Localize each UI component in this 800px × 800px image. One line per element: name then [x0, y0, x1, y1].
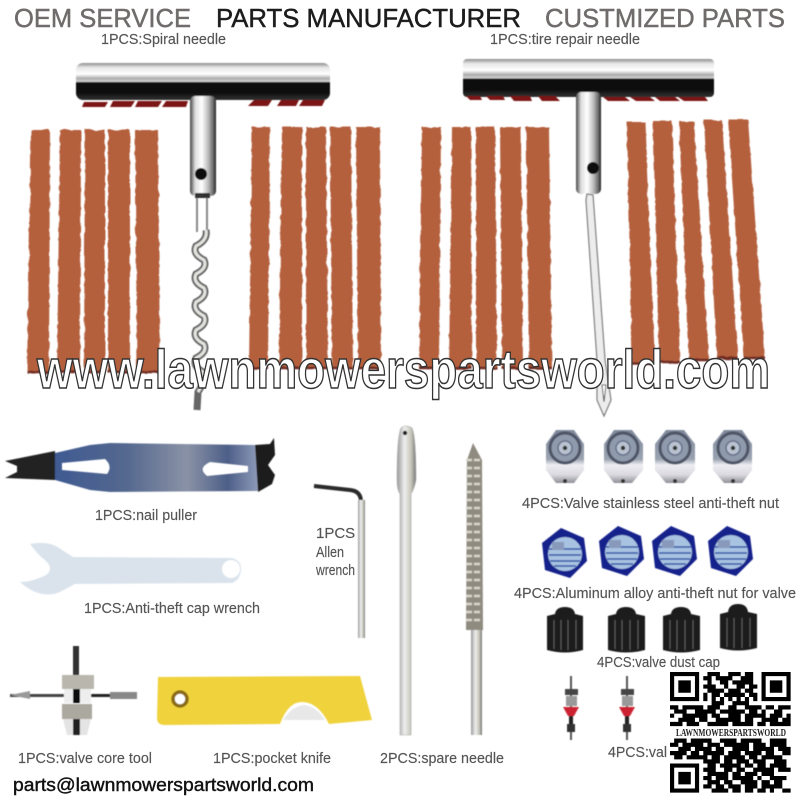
- spare needles: [397, 426, 483, 735]
- tire repair T-handle needle: [463, 59, 714, 416]
- valve core tool: [10, 646, 137, 735]
- red string: [82, 100, 325, 107]
- contact email: parts@lawnmowerspartsworld.com: [13, 775, 314, 795]
- valve core tool label: 1PCS:valve core tool: [18, 750, 152, 767]
- aluminum nut label: 4PCS:Aluminum alloy anti-theft nut for valve: [514, 585, 796, 602]
- cap wrench label: 1PCS:Anti-theft cap wrench: [84, 600, 260, 617]
- QR code: [667, 670, 800, 800]
- strip group 4: [627, 119, 765, 364]
- strip shadows: [27, 358, 765, 372]
- nail puller: [5, 438, 275, 492]
- strip group 2: [249, 127, 381, 368]
- dust cap label: 4PCS:valve dust cap: [597, 654, 720, 671]
- header banner: CUSTMIZED PARTS: [545, 3, 785, 33]
- shaft: [190, 96, 216, 196]
- header banner: OEM SERVICE: [14, 3, 191, 33]
- nail puller label: 1PCS:nail puller: [95, 507, 197, 524]
- steel anti-theft nuts: [546, 430, 752, 483]
- part labels top: 1PCS:tire repair needle: [490, 31, 640, 48]
- shaft: [576, 92, 601, 194]
- threaded needle: [471, 628, 482, 735]
- pocket knife: [157, 676, 372, 725]
- spiral: [197, 198, 207, 232]
- spiral T-handle needle: [76, 63, 330, 410]
- handle bar: [463, 59, 714, 97]
- Allen wrench label: [315, 525, 355, 579]
- Allen wrench: [314, 486, 365, 638]
- aluminum blue nuts: [542, 526, 753, 578]
- handle bar: [76, 63, 330, 100]
- pocket knife label: 1PCS:pocket knife: [213, 750, 331, 767]
- valve cores: [563, 676, 635, 740]
- anti-theft cap wrench: [20, 543, 241, 594]
- black dust caps: [547, 604, 757, 652]
- valve core label: 4PCS:val: [608, 744, 667, 761]
- part labels top: [101, 31, 640, 48]
- red string: [466, 96, 708, 101]
- Allen wrench label: wrench: [315, 562, 355, 579]
- part labels top: 1PCS:Spiral needle: [101, 31, 226, 48]
- needle: [586, 194, 611, 416]
- strip group 3: [419, 127, 552, 368]
- header banner: [14, 3, 785, 33]
- eye needle: [397, 426, 416, 735]
- Allen wrench label: Allen: [316, 544, 344, 561]
- rubber repair strips: [27, 119, 765, 372]
- Allen wrench label: 1PCS: [316, 525, 355, 542]
- spare needle label: 2PCS:spare needle: [380, 750, 504, 767]
- strip group 1: [27, 130, 160, 372]
- header banner: PARTS MANUFACTURER: [216, 3, 521, 33]
- steel nut label: 4PCS:Valve stainless steel anti-theft nut: [522, 495, 780, 512]
